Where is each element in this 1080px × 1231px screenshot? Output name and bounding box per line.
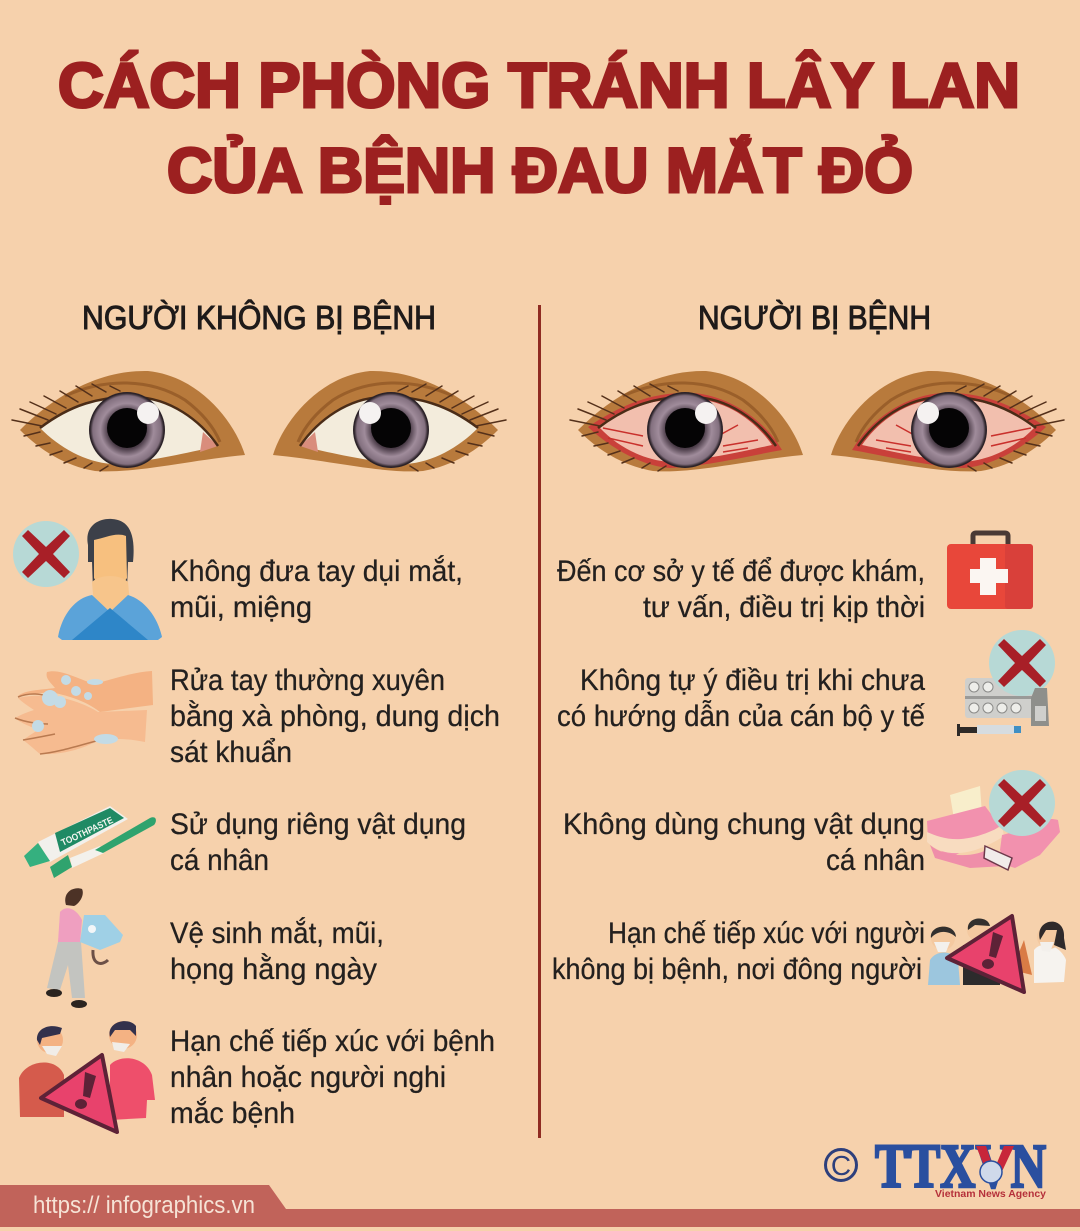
logo: TTXVN: C xyxy=(831,1150,851,1181)
title xyxy=(58,50,1020,206)
text: do not touch face xyxy=(170,555,463,624)
footer bar xyxy=(0,1185,1080,1227)
text: limit contact with patients: Hạn chế tiếp xúc với bệnh xyxy=(170,1025,495,1058)
text: limit contact with patients: nhân hoặc người nghi xyxy=(170,1061,446,1094)
icon: medicine with cross xyxy=(957,630,1055,736)
title: CÁCH PHÒNG TRÁNH LÂY LAN xyxy=(58,50,1020,121)
text: limit contact with others: Hạn chế tiếp xúc với người xyxy=(608,917,925,950)
text: wash hands: sát khuẩn xyxy=(170,736,292,769)
icon: healthy eyes xyxy=(12,371,506,471)
text: no sharing items: cá nhân xyxy=(826,844,925,877)
text: hygiene: họng hằng ngày xyxy=(170,953,377,986)
text: visit clinic: Đến cơ sở y tế để được khám, xyxy=(557,555,925,588)
text: personal items: cá nhân xyxy=(170,844,269,877)
text: personal items: Sử dụng riêng vật dụng xyxy=(170,808,466,841)
text: personal items xyxy=(170,808,466,877)
heading: healthy people: NGƯỜI KHÔNG BỊ BỆNH xyxy=(82,299,436,336)
icon: man covering face with cross xyxy=(13,519,162,640)
central divider xyxy=(538,305,541,1138)
text: no sharing items xyxy=(563,808,925,877)
icon: masked people with warning xyxy=(19,1021,155,1132)
icon: toothpaste and toothbrush xyxy=(24,806,156,878)
text: wash hands: Rửa tay thường xuyên xyxy=(170,664,445,697)
icon: washing hands xyxy=(15,671,153,754)
text: no sharing items: Không dùng chung vật dụng xyxy=(563,808,925,841)
text: limit contact with others: không bị bệnh, nơi đông người xyxy=(552,953,922,986)
icon: toothpaste and toothbrush: TOOTHPASTE xyxy=(60,815,115,849)
panel: advice for sick people xyxy=(552,533,1066,992)
logo: TTXVN: Vietnam News Agency xyxy=(935,1188,1046,1200)
text: limit contact with others xyxy=(552,917,925,986)
text: no self treatment: Không tự ý điều trị khi chưa xyxy=(580,664,926,697)
icon: red eyes xyxy=(570,371,1064,471)
text: no self treatment xyxy=(557,664,926,733)
icon: crowd with warning xyxy=(928,916,1066,992)
text: wash hands xyxy=(170,664,500,769)
text: do not touch face: Không đưa tay dụi mắt, xyxy=(170,555,463,588)
text: limit contact with patients: mắc bệnh xyxy=(170,1097,295,1130)
text: hygiene: Vệ sinh mắt, mũi, xyxy=(170,917,384,950)
logo: TTXVN xyxy=(826,1133,1046,1201)
panel: advice for healthy people xyxy=(13,519,500,1132)
icon: tissues and towels with cross xyxy=(927,770,1060,870)
text: do not touch face: mũi, miệng xyxy=(170,591,312,624)
footer url: https:// infographics.vn xyxy=(33,1192,255,1219)
text: visit clinic: tư vấn, điều trị kịp thời xyxy=(643,591,925,624)
text: no self treatment: có hướng dẫn của cán bộ y tế xyxy=(557,700,925,733)
icon: person at washbasin xyxy=(46,888,123,1008)
text: wash hands: bằng xà phòng, dung dịch xyxy=(170,700,500,733)
text: limit contact with patients xyxy=(170,1025,495,1130)
heading: sick people: NGƯỜI BỊ BỆNH xyxy=(698,299,931,336)
icon: first aid kit xyxy=(947,533,1033,609)
text: visit clinic xyxy=(557,555,925,624)
text: hygiene xyxy=(170,917,384,986)
title: CỦA BỆNH ĐAU MẮT ĐỎ xyxy=(167,135,913,206)
